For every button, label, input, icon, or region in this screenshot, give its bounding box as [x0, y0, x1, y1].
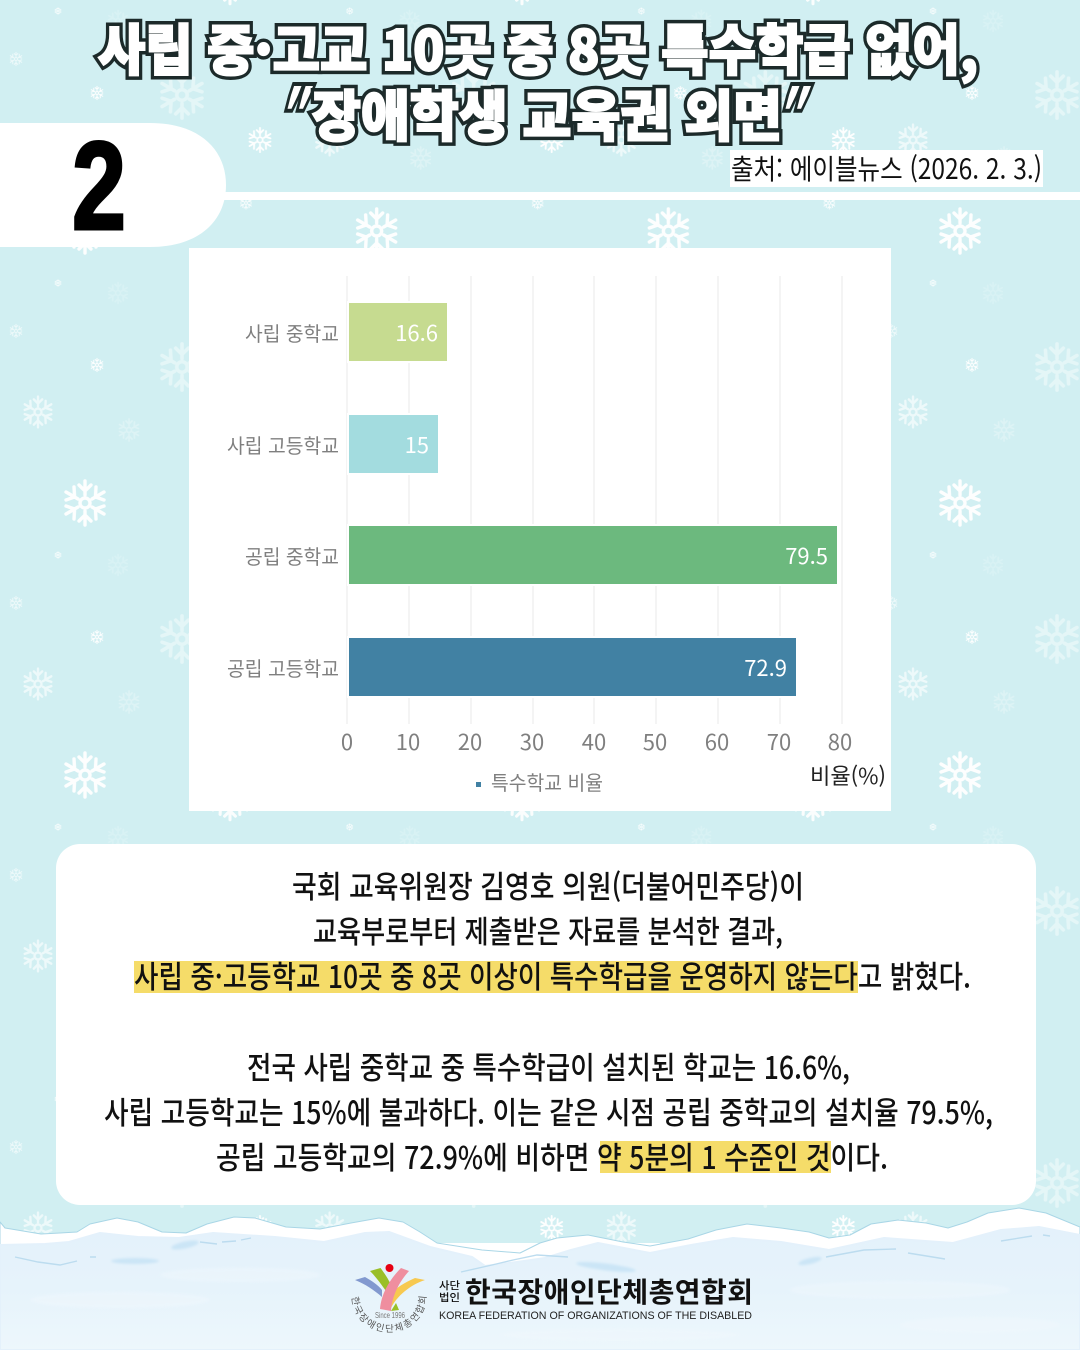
- bar value labels: 72.9: [744, 651, 787, 683]
- panel: bar chart: [189, 248, 891, 811]
- axis tick labels: 70: [767, 725, 791, 757]
- highlights: [134, 961, 858, 1173]
- axis tick labels: [341, 725, 852, 757]
- axis tick labels: 20: [458, 725, 482, 757]
- body paragraph text: 국회 교육위원장 김영호 의원(더불어민주당)이: [292, 862, 804, 907]
- bar value labels: 79.5: [785, 539, 828, 571]
- panel: body text: [56, 844, 1036, 1205]
- title: ": [764, 71, 820, 154]
- logo: federation name: 한국장애인단체총연합회: [465, 1271, 753, 1311]
- body paragraph text: [104, 862, 993, 1178]
- logo: federation emblem: Since 1996: [375, 1311, 405, 1320]
- chart gridlines: [347, 276, 842, 724]
- bar category labels: 공립 고등학교: [227, 653, 339, 682]
- axis tick labels: 60: [705, 725, 729, 757]
- logo: federation name: 법인: [439, 1290, 460, 1305]
- logo: federation emblem: 한국장애인단체총연합회: [352, 1296, 427, 1332]
- axis tick labels: 30: [520, 725, 544, 757]
- body paragraph text: 전국 사립 중학교 중 특수학급이 설치된 학교는 16.6%,: [247, 1043, 850, 1088]
- title: [98, 6, 978, 154]
- axis tick labels: 50: [643, 725, 667, 757]
- bar category labels: 사립 중학교: [245, 318, 339, 347]
- axis tick labels: 10: [396, 725, 420, 757]
- title: 장애학생 교육권 외면: [312, 72, 782, 152]
- number tab: [0, 117, 1080, 256]
- title: ": [266, 71, 322, 154]
- bar value labels: 16.6: [395, 316, 438, 348]
- bar value labels: [395, 316, 828, 683]
- number tab: 2: [72, 117, 126, 256]
- title: 사립 중·고교 10곳 중 8곳 특수학급 없어,: [98, 6, 978, 86]
- axis title: 비율(%): [810, 759, 886, 791]
- title: ": [266, 71, 322, 154]
- title: 사립 중·고교 10곳 중 8곳 특수학급 없어,: [98, 6, 978, 86]
- legend: 특수학교 비율: [491, 767, 603, 796]
- axis tick labels: 80: [828, 725, 852, 757]
- body paragraph text: 교육부로부터 제출받은 자료를 분석한 결과,: [313, 907, 783, 952]
- logo: federation emblem: [352, 1264, 427, 1332]
- title: ": [764, 71, 820, 154]
- bar category labels: 사립 고등학교: [227, 430, 339, 459]
- body paragraph text: 공립 고등학교의 72.9%에 비하면 약 5분의 1 수준인 것이다.: [216, 1133, 888, 1178]
- logo: federation name: 사단: [439, 1278, 460, 1293]
- bar category labels: [227, 318, 339, 682]
- source label: 출처: 에이블뉴스 (2026. 2. 3.): [731, 148, 1042, 188]
- axis tick labels: 40: [582, 725, 606, 757]
- snow ground: [0, 1208, 1080, 1350]
- title: 장애학생 교육권 외면: [312, 72, 782, 152]
- bar category labels: 공립 중학교: [245, 541, 339, 570]
- logo: federation name: KOREA FEDERATION OF ORGANIZATIONS OF THE DISABLED: [439, 1310, 752, 1322]
- bars: [347, 301, 839, 698]
- bar value labels: 15: [405, 428, 429, 460]
- axis tick labels: 0: [341, 725, 353, 757]
